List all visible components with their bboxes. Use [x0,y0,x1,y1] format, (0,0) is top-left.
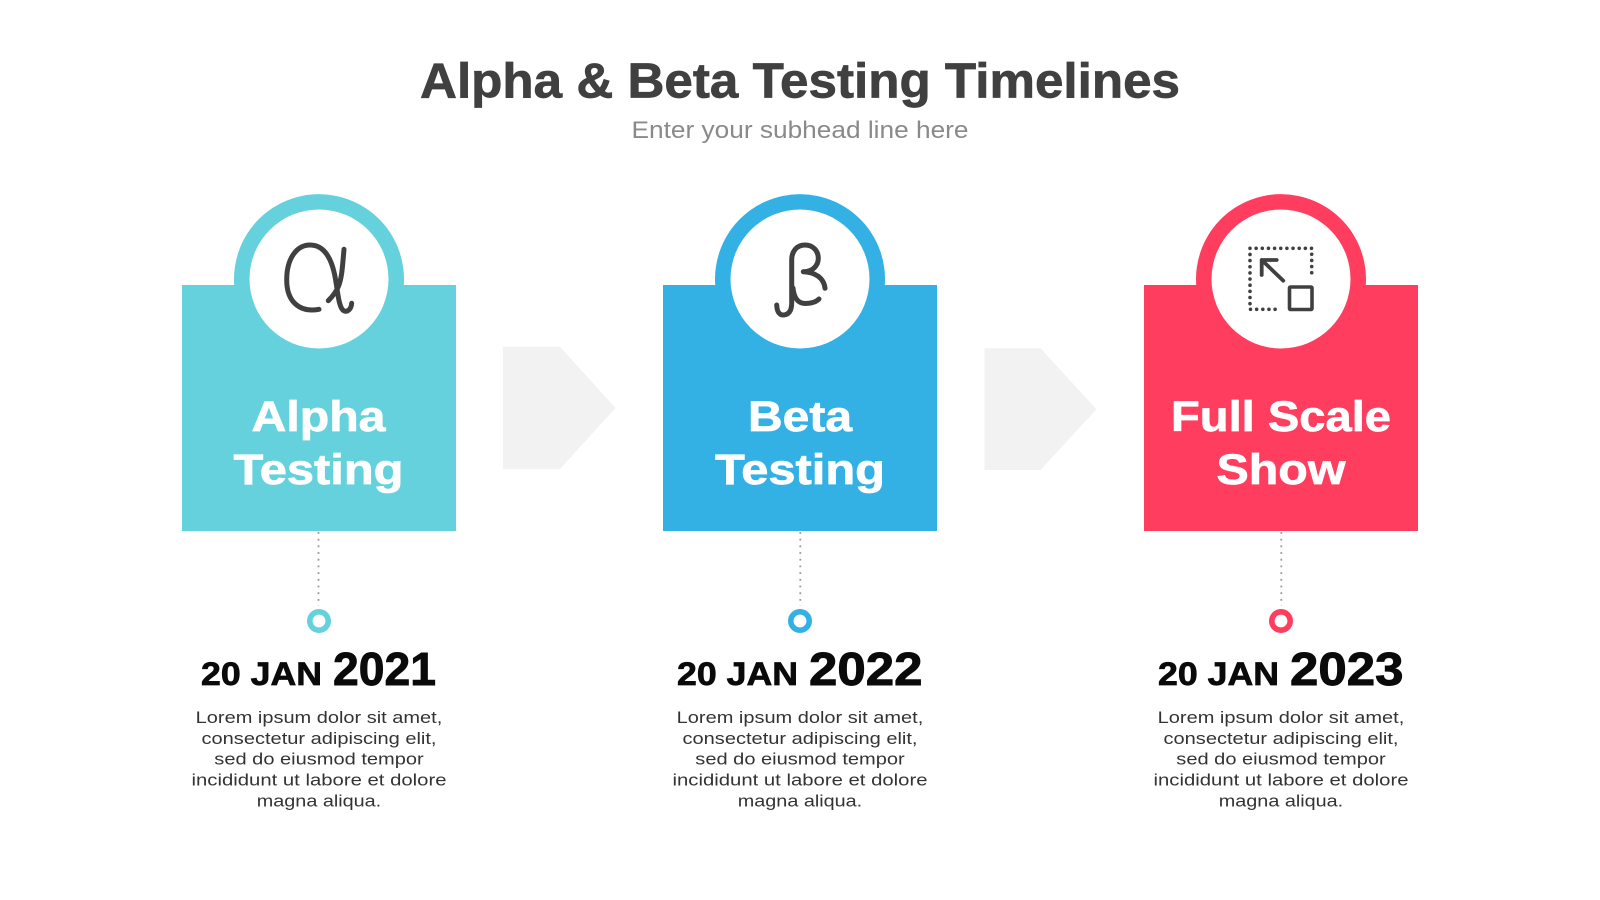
connector line: full scale [1280,532,1282,606]
body text: alpha: magna aliqua. [257,791,381,810]
card heading: full scale: Full Scale [1171,393,1391,441]
date: beta [677,643,922,695]
body text: alpha: Lorem ipsum dolor sit amet, [196,708,442,727]
timeline marker: alpha [310,612,328,630]
card heading: full scale: Show [1216,446,1346,494]
title: Alpha & Beta Testing Timelines [420,54,1180,108]
timeline marker: full scale [1272,612,1290,630]
card shape: alpha [182,194,456,531]
card shape: full scale [1144,194,1418,531]
body text: full scale: incididunt ut labore et dolore [1154,770,1408,789]
card heading: alpha [234,393,404,494]
connector line: alpha [318,532,320,606]
body text: beta: magna aliqua. [738,791,862,810]
connector line: beta [799,532,801,606]
body text: alpha: incididunt ut labore et dolore [192,770,446,789]
body text: full scale [1154,708,1408,810]
body text: full scale: sed do eiusmod tempor [1176,750,1386,769]
icon disc: beta [730,210,870,348]
arrow: alpha to beta [503,347,616,469]
body text: full scale: magna aliqua. [1219,791,1343,810]
arrow: beta to full scale [984,348,1096,470]
date: full scale [1158,643,1404,695]
panel: full scale show [1144,194,1418,810]
date: full scale: 20 JAN [1158,656,1279,692]
body text: full scale: consectetur adipiscing elit, [1164,729,1398,748]
icon disc: alpha [250,210,388,348]
date: beta: 20 JAN [677,656,798,692]
icon: alpha symbol [287,245,352,311]
body text: alpha [192,708,446,810]
icon: resize arrow [1250,248,1312,310]
body text: alpha: consectetur adipiscing elit, [202,729,436,748]
card shape: beta [663,194,937,531]
card heading: beta [715,393,885,494]
body text: beta: incididunt ut labore et dolore [672,770,928,789]
body text: alpha: sed do eiusmod tempor [214,750,424,769]
icon: beta symbol [777,245,825,315]
date: alpha: 20 JAN [201,656,322,692]
date: full scale: 2023 [1290,643,1404,695]
subtitle: Enter your subhead line here [632,117,968,144]
icon disc: full scale [1212,210,1350,348]
body text: beta: consectetur adipiscing elit, [682,729,918,748]
date: alpha [201,643,436,695]
card heading: beta: Testing [715,446,885,494]
panel: beta testing [663,194,937,810]
date: alpha: 2021 [333,643,436,695]
date: beta: 2022 [809,643,922,695]
card heading: alpha: Alpha [252,393,387,441]
timeline marker: beta [791,612,809,630]
panel: alpha testing [182,194,456,810]
card heading: alpha: Testing [234,446,404,494]
body text: beta: sed do eiusmod tempor [695,750,905,769]
body text: beta: Lorem ipsum dolor sit amet, [677,708,923,727]
body text: full scale: Lorem ipsum dolor sit amet, [1158,708,1404,727]
card heading: beta: Beta [748,393,853,441]
body text: beta [672,708,928,810]
card heading: full scale [1171,393,1391,494]
